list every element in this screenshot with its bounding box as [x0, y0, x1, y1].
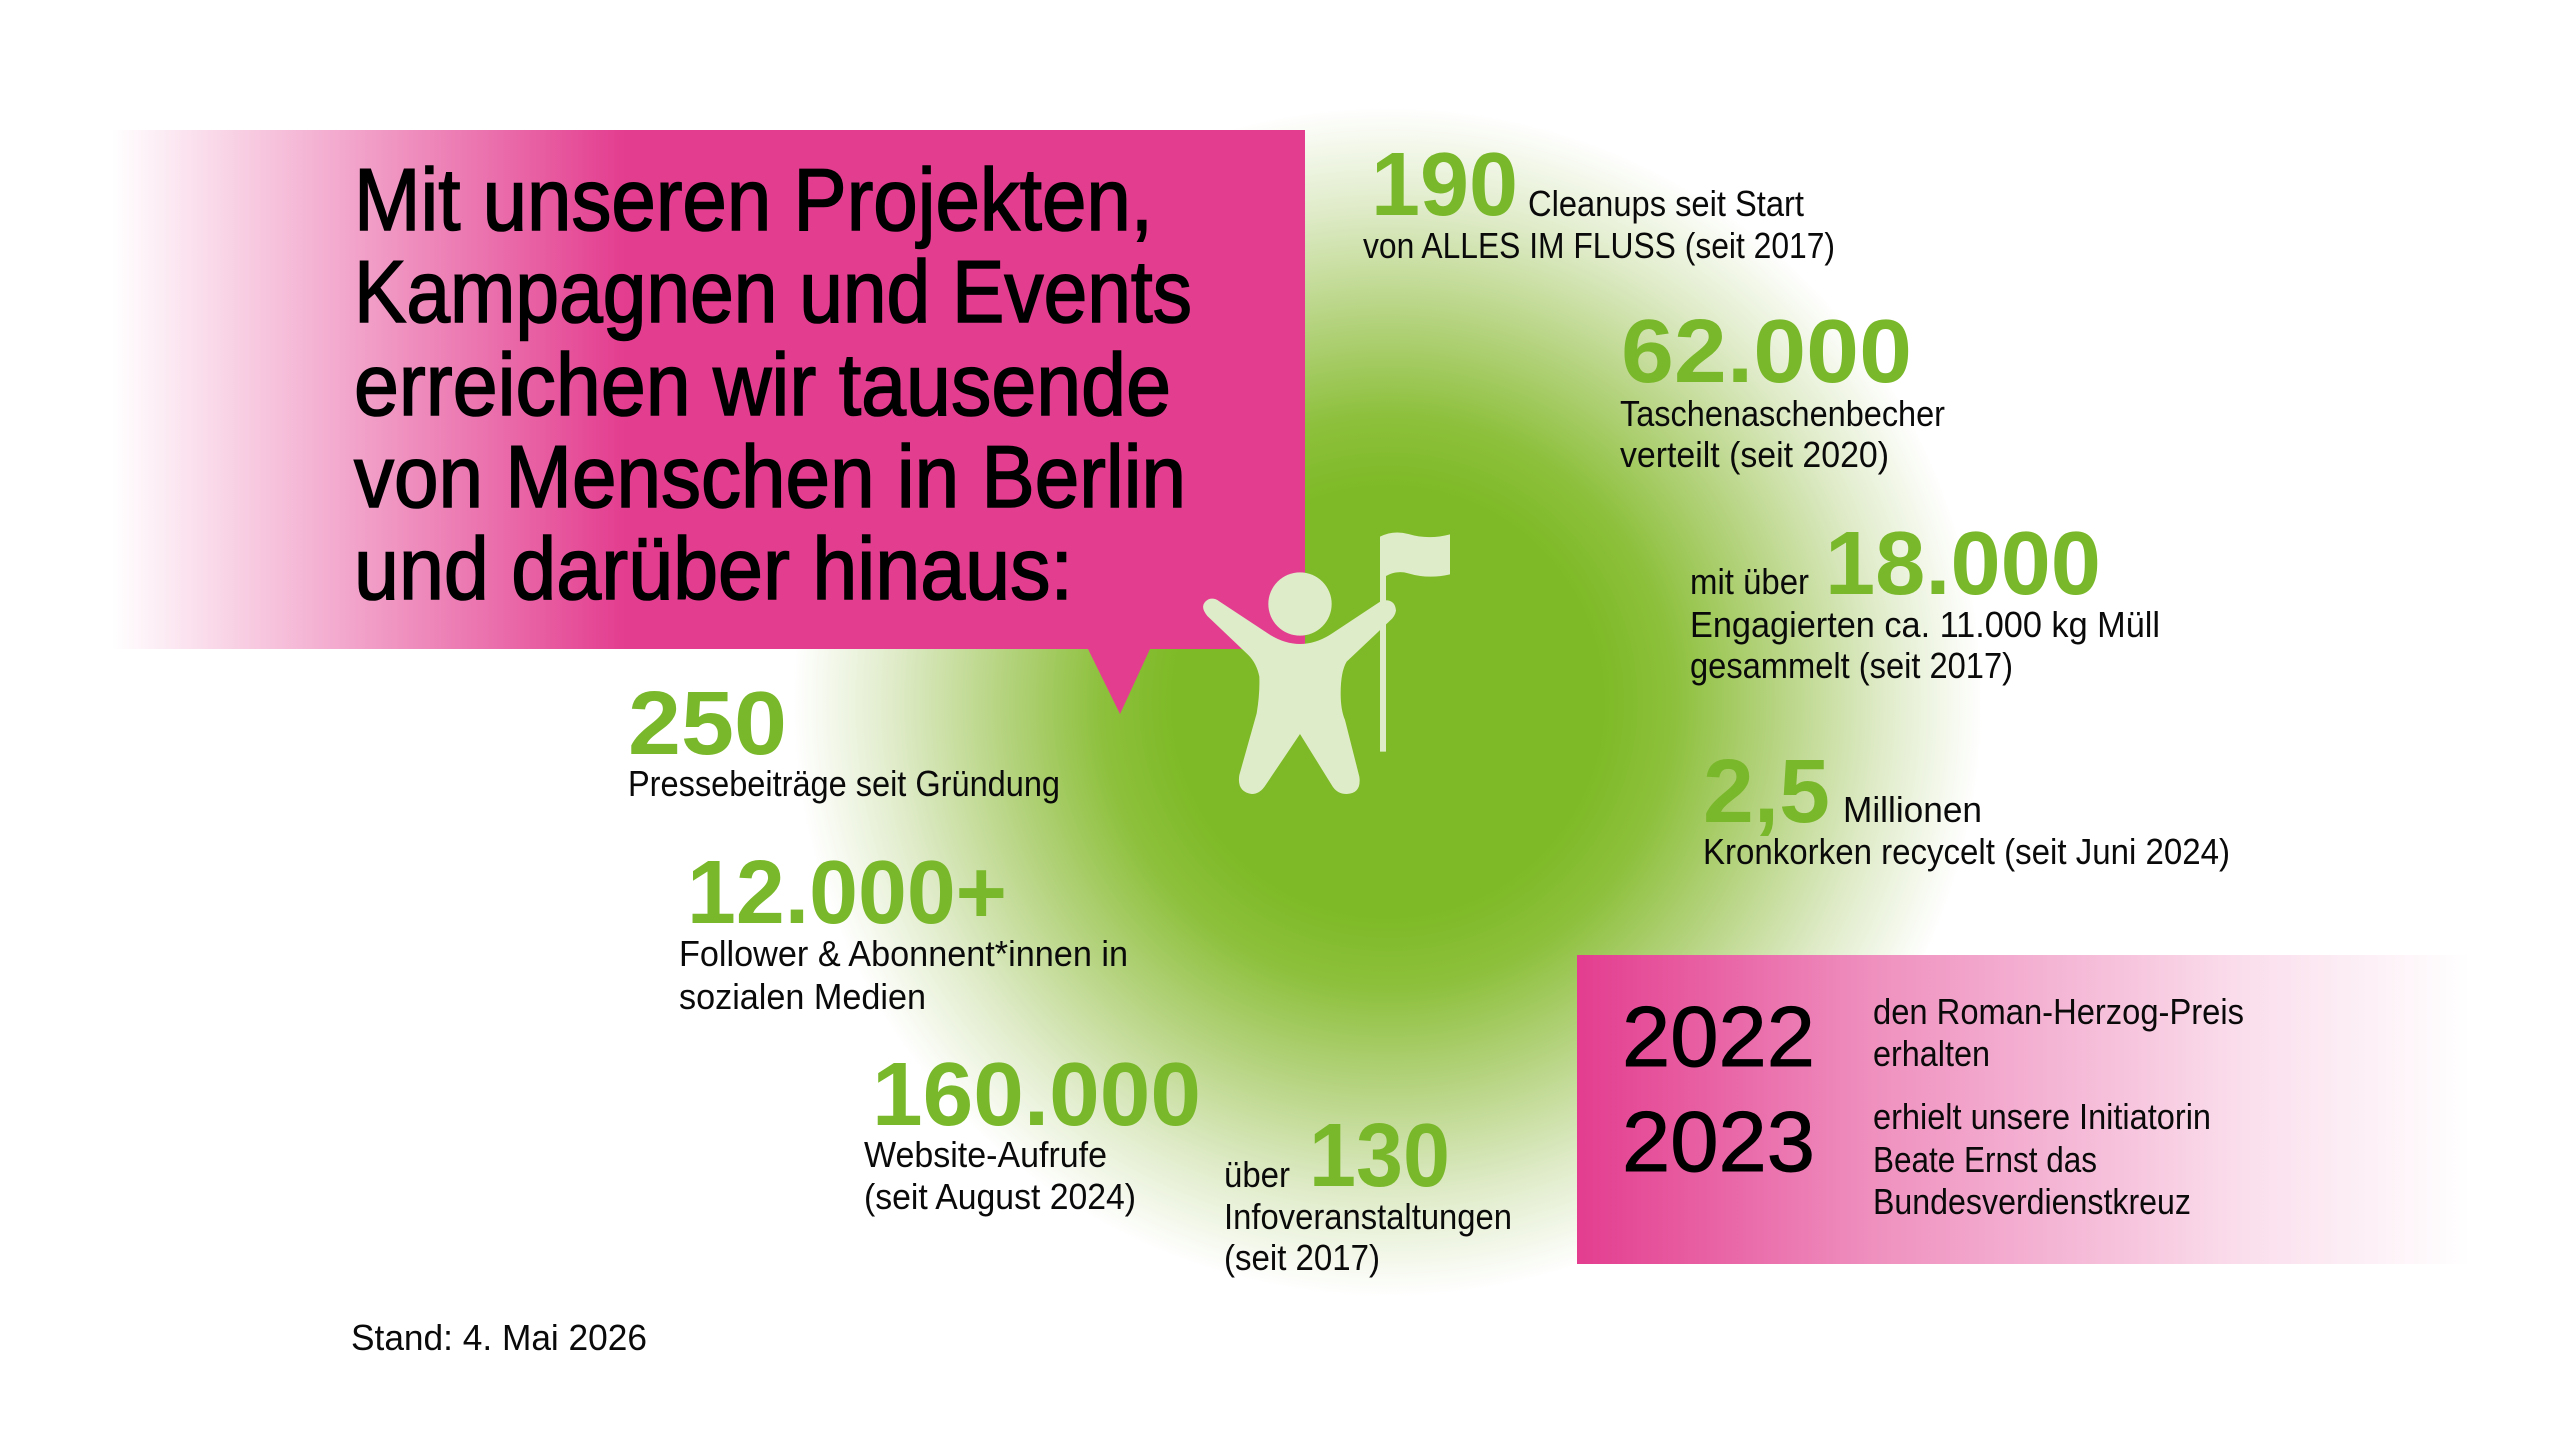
stat: 2,5 Millionen: Kronkorken recycelt (seit Juni 2024) [1703, 831, 2230, 872]
icon: person with flag [1203, 532, 1450, 794]
award 2023 [1622, 1095, 2211, 1222]
stat: 160.000 [864, 1045, 1201, 1217]
stat: 190 cleanups: von ALLES IM FLUSS (seit 2017) [1363, 225, 1835, 266]
award 2022 [1622, 990, 2244, 1085]
stat: 2,5 Millionen: 2,5 [1703, 742, 1830, 842]
stat: 18.000: gesammelt (seit 2017) [1690, 645, 2013, 686]
stat: 18.000: 18.000 [1825, 514, 2101, 614]
panel: pink headline speech bubble [112, 130, 1305, 714]
stat: 130: (seit 2017) [1224, 1237, 1380, 1278]
panel: awards [1577, 955, 2470, 1264]
date note: Stand: 4. Mai 2026 [351, 1317, 647, 1358]
award 2022: 2022 [1622, 990, 1815, 1085]
award 2023: Bundesverdienstkreuz [1873, 1181, 2191, 1222]
green radial glow [793, 107, 1983, 1297]
stat: 250: 250 [628, 674, 787, 774]
award 2023: erhielt unsere Initiatorin [1873, 1096, 2211, 1137]
stat: 250: Pressebeiträge seit Gründung [628, 763, 1060, 804]
award 2023: Beate Ernst das [1873, 1139, 2097, 1180]
stat: 62.000: 62.000 [1621, 302, 1912, 402]
stat: 160.000: Website-Aufrufe [864, 1134, 1107, 1175]
stat: 130 [1224, 1106, 1512, 1278]
heading: und darüber hinaus: [354, 519, 1073, 618]
stat: 160.000: 160.000 [872, 1045, 1201, 1145]
heading [354, 150, 1192, 618]
heading: Kampagnen und Events [354, 242, 1192, 341]
stat: 130: 130 [1309, 1106, 1450, 1206]
stat: 250 [628, 674, 1060, 804]
stat: 12.000+: sozialen Medien [679, 976, 926, 1017]
stat: 130: Infoveranstaltungen [1224, 1196, 1512, 1237]
stat: 2,5 Millionen [1703, 742, 2230, 872]
award 2023: 2023 [1622, 1095, 1815, 1190]
heading: von Menschen in Berlin [354, 427, 1186, 526]
award 2022: erhalten [1873, 1033, 1990, 1074]
stat: 12.000+: 12.000+ [687, 843, 1007, 943]
stat: 18.000: mit über [1690, 561, 1809, 602]
stat: 130: über [1224, 1154, 1290, 1195]
stat: 62.000 [1620, 302, 1945, 475]
stat: 2,5 Millionen: Millionen [1843, 789, 1982, 830]
stat: 18.000: Engagierten ca. 11.000 kg Müll [1690, 604, 2160, 645]
heading: Mit unseren Projekten, [354, 150, 1153, 249]
stat: 190 cleanups: 190 [1371, 135, 1518, 235]
stat: 62.000: verteilt (seit 2020) [1620, 434, 1889, 475]
stat: 190 cleanups [1363, 135, 1835, 266]
stat: 12.000+ [679, 843, 1128, 1017]
stat: 12.000+: Follower & Abonnent*innen in [679, 933, 1128, 974]
stat: 190 cleanups: Cleanups seit Start [1528, 183, 1804, 224]
stat: 18.000 [1690, 514, 2160, 686]
stat: 160.000: (seit August 2024) [864, 1176, 1136, 1217]
heading: erreichen wir tausende [354, 335, 1171, 434]
speech bubble tail [1088, 649, 1150, 714]
stat: 62.000: Taschenaschenbecher [1620, 393, 1945, 434]
award 2022: den Roman-Herzog-Preis [1873, 991, 2244, 1032]
